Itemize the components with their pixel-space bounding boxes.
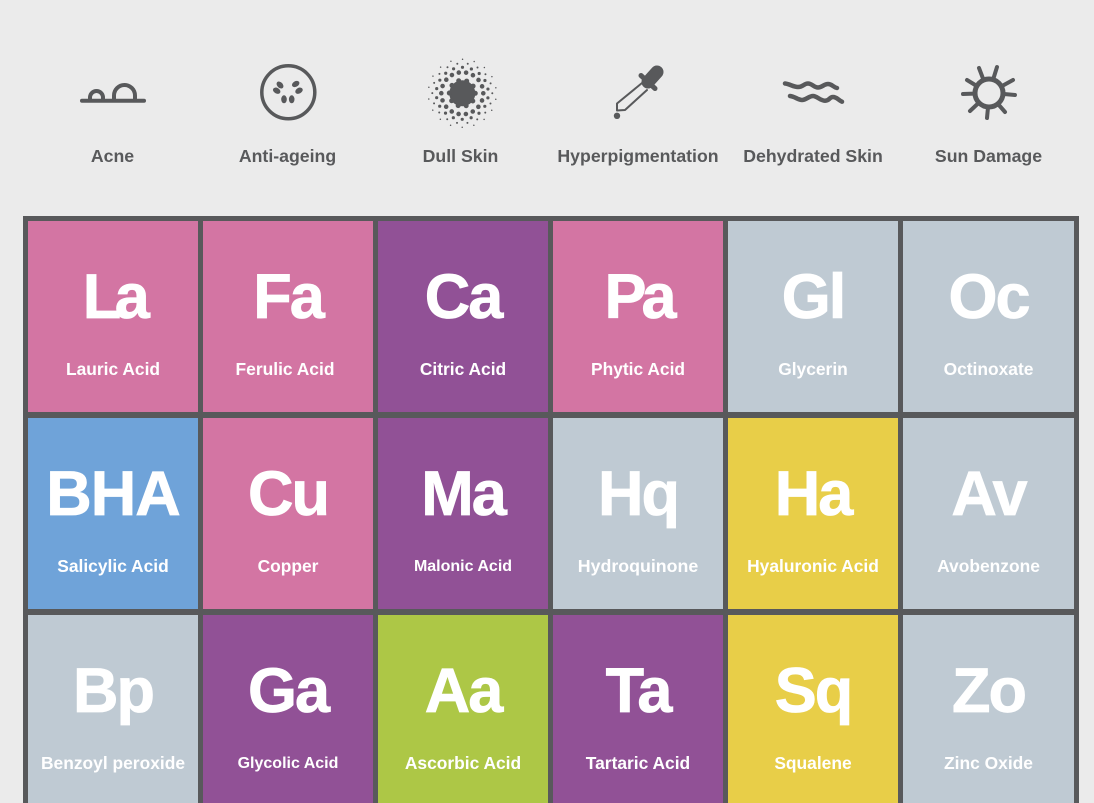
cell: Oc: Oc [948, 262, 1029, 332]
cell: Ga [203, 615, 373, 803]
concern: dull skin [423, 59, 498, 166]
cell: Fa: Ferulic Acid [236, 359, 334, 379]
cell: Ha [728, 418, 898, 609]
cell: La: Lauric Acid [66, 359, 160, 379]
cell: BHA [28, 418, 198, 609]
icon: acne bumps [82, 85, 144, 101]
cell: Pa: Pa [604, 262, 672, 332]
icon: dotted burst [428, 59, 496, 127]
cell: Aa: Aa [425, 656, 501, 726]
concern: hyperpigmentation [557, 72, 719, 166]
cell: La: La [83, 262, 143, 332]
cell: Ga: Glycolic Acid [238, 755, 338, 772]
concern: anti-ageing [239, 66, 336, 166]
cell: Cu: Cu [248, 459, 328, 529]
concern: sun damage [935, 67, 1042, 166]
concern: acne [82, 85, 144, 166]
cell: Zo: Zo [952, 656, 1025, 726]
cell: Ta: Ta [606, 656, 670, 726]
cell: Sq: Sq [775, 656, 851, 726]
cell: Gl: Gl [782, 262, 844, 332]
cell: Ga: Ga [248, 656, 328, 726]
cell: Ha: Hyaluronic Acid [747, 556, 879, 576]
skin concerns row [80, 58, 1042, 166]
cell: Ma [378, 418, 548, 609]
cell: Bp [28, 615, 198, 803]
cell: Aa: Ascorbic Acid [405, 753, 521, 773]
cell: Sq: Squalene [774, 753, 852, 773]
cell: Cu [203, 418, 373, 609]
cell: Sq [728, 615, 898, 803]
icon: circle with seeds [262, 66, 315, 119]
cell: Hq [553, 418, 723, 609]
cell: Av: Avobenzone [937, 556, 1040, 576]
cell: Bp: Bp [73, 656, 153, 726]
cell: Ma: Ma [421, 459, 505, 529]
cell: Cu: Copper [258, 556, 318, 576]
cell: Oc [903, 221, 1074, 412]
cell: BHA: BHA [46, 459, 180, 529]
label: anti-ageing: Anti-ageing [239, 146, 336, 166]
cell: Ta [553, 615, 723, 803]
icon: sun [963, 67, 1015, 118]
label: sun damage: Sun Damage [935, 146, 1042, 166]
cell: Hq: Hq [598, 459, 678, 529]
cell: BHA: Salicylic Acid [57, 556, 169, 576]
cell: Ta: Tartaric Acid [586, 753, 690, 773]
cell: Ca [378, 221, 548, 412]
cell: Oc: Octinoxate [944, 359, 1033, 379]
label: dehydrated skin: Dehydrated Skin [743, 146, 883, 166]
cell: Av [903, 418, 1074, 609]
cell: Gl: Glycerin [778, 359, 848, 379]
cell: Fa: Fa [253, 262, 323, 332]
cell: Av: Av [951, 459, 1026, 529]
periodic table grid [23, 216, 1079, 803]
cell: La [28, 221, 198, 412]
cell: Ca: Ca [425, 262, 501, 332]
cell: Ca: Citric Acid [420, 359, 506, 379]
cell: Hq: Hydroquinone [578, 556, 698, 576]
concern: dehydrated skin [743, 84, 883, 166]
cell: Pa [553, 221, 723, 412]
icon: dropper [614, 72, 657, 119]
cell: Fa [203, 221, 373, 412]
label: hyperpigmentation: Hyperpigmentation [557, 146, 719, 166]
icon: waves [785, 84, 842, 102]
cell: Bp: Benzoyl peroxide [41, 753, 185, 773]
label: dull skin: Dull Skin [423, 146, 498, 166]
cell: Ha: Ha [775, 459, 851, 529]
cell: Zo: Zinc Oxide [944, 753, 1033, 773]
cell: Aa [378, 615, 548, 803]
cell: Zo [903, 615, 1074, 803]
cell: Ma: Malonic Acid [414, 558, 512, 575]
cell: Gl [728, 221, 898, 412]
label: acne: Acne [91, 146, 134, 166]
cell: Pa: Phytic Acid [591, 359, 685, 379]
